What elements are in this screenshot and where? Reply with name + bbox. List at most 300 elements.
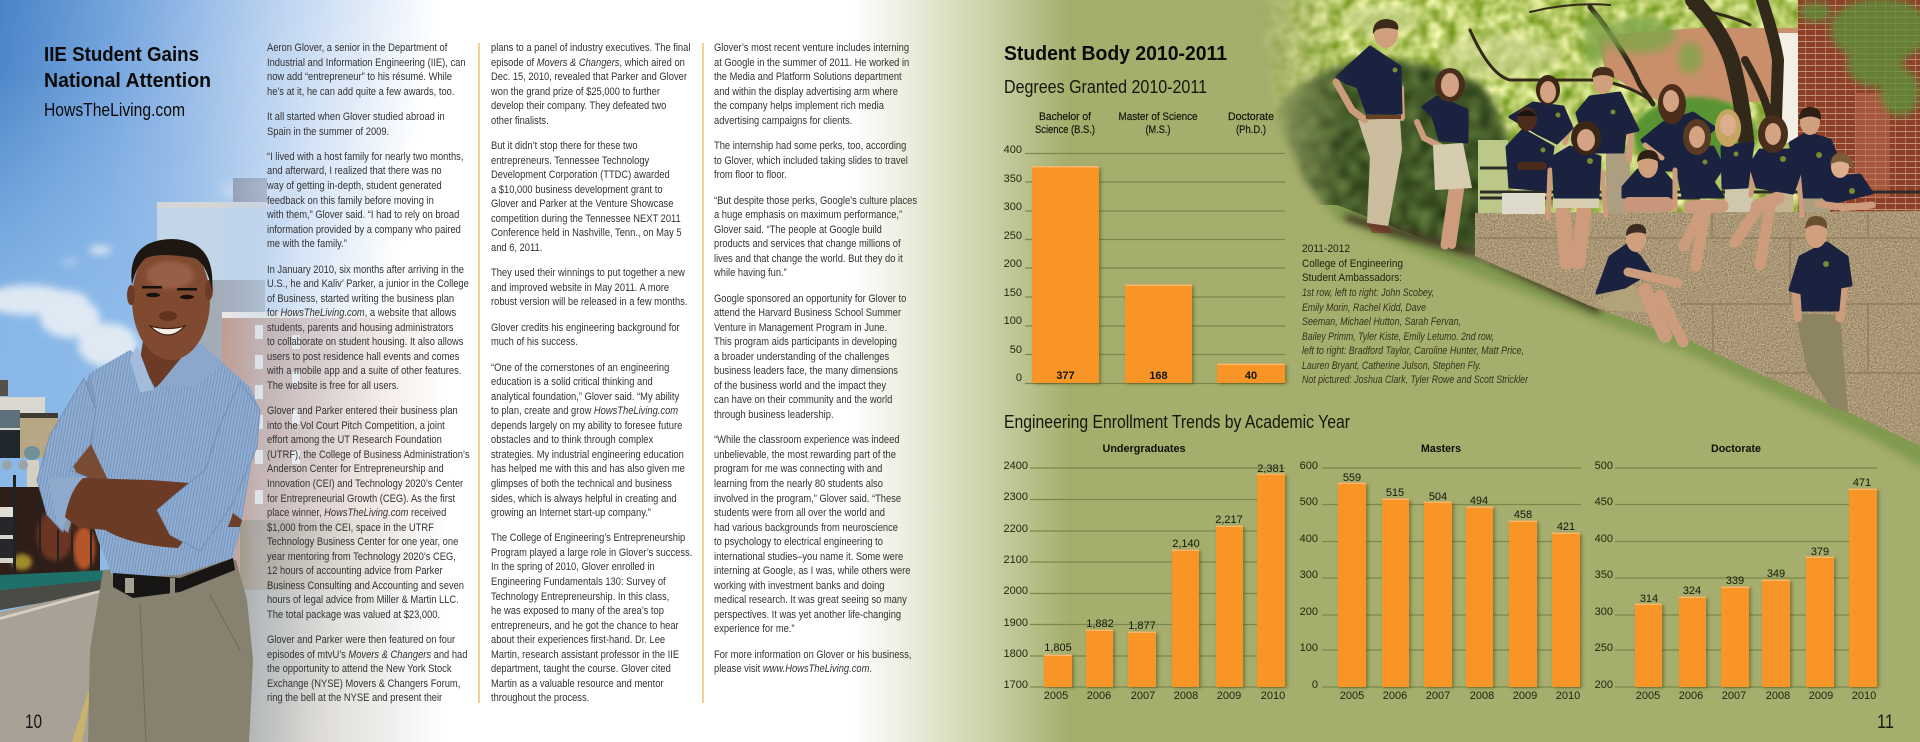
right sleeve (157, 382, 260, 551)
y axis labels: 500 (1300, 496, 1318, 508)
article column 2: other finalists. (491, 115, 549, 127)
hand behind arm (228, 513, 242, 527)
article column 2: sides, which is always helpful in creating and (491, 492, 677, 504)
dark bush (1260, 60, 1510, 253)
y axis labels: 600 (1300, 460, 1318, 472)
article column 1: for Entrepreneurial Growth (CEG). As the first (267, 492, 455, 504)
values (1343, 472, 1575, 533)
foliage right (1799, 0, 1920, 116)
article column 1: feedback on this family before moving in (267, 195, 434, 207)
article column 3: the company helps implement rich media (714, 100, 884, 112)
stone wall (1475, 211, 1920, 455)
bars (1032, 167, 1285, 383)
y axis labels: 400 (1004, 144, 1022, 156)
hanging leaves (1583, 12, 1702, 74)
y axis labels: 200 (1595, 679, 1613, 691)
years: 2006 (1087, 690, 1111, 702)
caption: student ambassadors: left to right: Bradford Taylor, Caroline Hunter, Matt Price, (1302, 345, 1524, 357)
values: 559 (1343, 472, 1361, 484)
values: 1,805 (1044, 642, 1072, 654)
article column 2: Glover credits his engineering background for (491, 322, 680, 334)
values: 379 (1811, 546, 1829, 558)
y axis labels: 250 (1595, 642, 1613, 654)
caption: student ambassadors: Student Ambassadors: (1302, 272, 1402, 284)
y axis labels: 0 (1312, 679, 1318, 691)
bar highlights (1044, 474, 1285, 656)
article column 1: Aeron Glover, a senior in the Department of (267, 42, 447, 54)
y axis labels: 150 (1004, 287, 1022, 299)
person 4 (1502, 107, 1553, 214)
column rule 1 (478, 43, 480, 703)
tree trunks (1470, 0, 1778, 140)
values: 504 (1429, 491, 1447, 503)
article column 3: products and services that change millions of (714, 238, 901, 250)
person 11 (1735, 115, 1802, 265)
article column 1: students, parents and housing administrators (267, 322, 454, 334)
article column 2: Martin, research assistant professor in the IIE (491, 649, 679, 661)
heading: IIE Student Gains National Attention: IIE Student Gains (44, 44, 199, 66)
article column 3: business leaders face, the many dimensions (714, 365, 898, 377)
y axis labels: 100 (1300, 642, 1318, 654)
column headers: Master of Science (1118, 111, 1198, 123)
article column 1: to collaborate on student housing. It also allows (267, 336, 463, 348)
railing (1480, 168, 1920, 198)
y axis labels: 50 (1010, 344, 1022, 356)
y axis labels: 2400 (1004, 460, 1028, 472)
article column 1 (267, 42, 470, 704)
article column 2: robust version will be released in a few months. (491, 296, 687, 308)
foliage (1266, 0, 1798, 213)
article column 3: Glover said. “The people at Google build (714, 224, 882, 236)
head (132, 240, 210, 360)
article column 3: from floor to floor. (714, 169, 787, 181)
article column 2: Martin as a valuable resource and mentor (491, 678, 664, 690)
article column 1: The website is free for all users. (267, 380, 399, 392)
article column 3: through business leadership. (714, 409, 834, 421)
caption: student ambassadors: Not pictured: Joshua Clark, Tyler Rowe and Scott Strickler (1302, 374, 1529, 386)
article column 3: “But despite those perks, Google’s culture places (714, 195, 917, 207)
article column 1: Exchange (NYSE) Movers & Changers Forum, (267, 678, 460, 690)
years: 2008 (1470, 690, 1494, 702)
y axis labels: 0 (1016, 372, 1022, 384)
years: 2010 (1852, 690, 1876, 702)
article column 2: glimpses of both the technical and business (491, 478, 672, 490)
years (1340, 690, 1580, 702)
article column 3: a huge emphasis on maximum performance,” (714, 209, 902, 221)
article column 3 (714, 42, 917, 675)
article column 3: the Media and Platform Solutions department (714, 71, 902, 83)
article column 1: with a mobile app and a suite of other features. (267, 365, 461, 377)
article column 1: Technology Business Center for one year, one (267, 536, 458, 548)
grass slope (1319, 205, 1920, 470)
years: 2005 (1636, 690, 1660, 702)
page number 11: 11 (1877, 712, 1894, 733)
person 6 (1548, 121, 1606, 262)
article column 2: throughout the process. (491, 692, 589, 704)
chart: masters (1300, 443, 1581, 702)
years: 2010 (1261, 690, 1285, 702)
heading: IIE Student Gains National Attention: National Attention (44, 70, 211, 92)
article column 3: attend the Harvard Business School Summer (714, 307, 901, 319)
caption: student ambassadors: 1st row, left to right: John Scobey, (1302, 287, 1434, 299)
article column 2: entrepreneurs. Tennessee Technology (491, 155, 649, 167)
values: 339 (1726, 575, 1744, 587)
years: 2006 (1679, 690, 1703, 702)
y axis labels: 300 (1300, 569, 1318, 581)
article column 1: me with the family.” (267, 238, 347, 250)
trees (0, 487, 100, 575)
article column 3: Google sponsored an opportunity for Glover to (714, 293, 906, 305)
article column 2: In the spring of 2010, Glover enrolled in (491, 561, 655, 573)
article column 2: obstacles and to think through complex (491, 434, 653, 446)
article column 3: Glover’s most recent venture includes interning (714, 42, 909, 54)
article column 1: Spain in the summer of 2009. (267, 126, 389, 138)
person 15 (1790, 216, 1851, 413)
column rule 2 (702, 43, 704, 703)
article column 3: at Google in the summer of 2011. He worked in (714, 57, 909, 69)
y axis labels: 350 (1004, 173, 1022, 185)
years: 2009 (1809, 690, 1833, 702)
bar values: 40 (1245, 370, 1257, 382)
left buildings (0, 380, 8, 396)
article column 2: much of his success. (491, 336, 578, 348)
bar values (1056, 370, 1257, 382)
article column 3: please visit www.HowsTheLiving.com. (714, 663, 872, 675)
article column 1: Business Consulting and Accounting and seven (267, 580, 464, 592)
back hand (72, 438, 108, 492)
years (1044, 690, 1285, 702)
shirt shading (62, 373, 96, 450)
years: 2008 (1174, 690, 1198, 702)
bridge railing (0, 570, 110, 590)
caption: student ambassadors: Bailey Primm, Tyler Kiste, Emily Letumo. 2nd row, (1302, 331, 1494, 343)
collar (130, 345, 154, 392)
article column 1: now add “entrepreneur” to his résumé. While (267, 71, 452, 83)
bars (1044, 474, 1285, 687)
y axis labels: 2000 (1004, 585, 1028, 597)
column headers: Doctorate (1228, 111, 1274, 123)
article column 1: 12 hours of accounting advice from Parker (267, 565, 443, 577)
y axis labels: 2100 (1004, 554, 1028, 566)
values: 1,877 (1128, 620, 1156, 632)
article column 1: It all started when Glover studied abroad in (267, 111, 445, 123)
column headers: (M.S.) (1146, 124, 1170, 136)
person 3 (1510, 75, 1572, 143)
y axis labels: 2300 (1004, 491, 1028, 503)
article column 1: Industrial and Information Engineering (IIE), can (267, 57, 466, 69)
grid lines (1030, 468, 1285, 687)
dirt strip (1345, 218, 1600, 310)
grid lines (1322, 468, 1581, 687)
article column 2: plans to a panel of industry executives. The final (491, 42, 690, 54)
grid lines (1025, 154, 1285, 384)
polo crests (1392, 68, 1855, 267)
article column 1: Innovation (CEI) and Technology 2020’s Center (267, 478, 463, 490)
page number 10: 10 (25, 712, 42, 733)
subheading: Enrollment Trends: Engineering Enrollment Trends by Academic Year (1004, 412, 1350, 432)
article column 2: episode of Movers & Changers, which aired on (491, 57, 685, 69)
article column 2: education is a solid critical thinking and (491, 376, 653, 388)
article column 1: “I lived with a host family for nearly two months, (267, 151, 463, 163)
fade to page at left (1255, 0, 1345, 260)
y axis labels: 300 (1595, 606, 1613, 618)
y axis labels: 2200 (1004, 523, 1028, 535)
person 10 (1715, 109, 1753, 212)
caption: student ambassadors (1302, 243, 1529, 386)
bar highlights (1338, 482, 1580, 534)
article column 1: place winner, HowsTheLiving.com received (267, 507, 446, 519)
article column 1: year mentoring from Technology 2020’s CEG, (267, 551, 456, 563)
years: 2005 (1340, 690, 1364, 702)
article column 2: a $10,000 business development grant to (491, 184, 663, 196)
forearm (65, 478, 200, 548)
subheading: Degrees Granted: Degrees Granted 2010-2011 (1004, 77, 1207, 97)
article column 2: growing an Internet start-up company.” (491, 507, 651, 519)
article column 3: program for me was connecting with and (714, 463, 882, 475)
lamp posts (13, 475, 92, 574)
bar highlights (1635, 488, 1877, 605)
article column 2: Program played a large role in Glover’s success. (491, 547, 692, 559)
years: 2007 (1131, 690, 1155, 702)
article column 2: to plan, create and grow HowsTheLiving.com (491, 405, 678, 417)
y axis labels: 200 (1004, 258, 1022, 270)
years: 2005 (1044, 690, 1068, 702)
article column 3: unbelievable, the most rewarding part of the (714, 449, 896, 461)
person 13 (1818, 153, 1872, 208)
values: 471 (1853, 477, 1871, 489)
person 1 (1336, 19, 1402, 233)
chart title: Masters (1421, 443, 1461, 455)
article column 1: the opportunity to attend the New York Stock (267, 663, 452, 675)
bright gaps (1340, 4, 1590, 180)
person 12 (1790, 107, 1837, 212)
article column 2: and improved website in May 2011. A more (491, 282, 669, 294)
heading: Student Body 2010-2011: Student Body 2010-2011 (1004, 43, 1227, 65)
bar highlights (1032, 166, 1285, 365)
years: 2009 (1513, 690, 1537, 702)
green page background (850, 0, 1920, 742)
article column 2: depends largely on my ability to foresee future (491, 420, 682, 432)
y axis labels (1004, 460, 1028, 691)
column headers: Science (B.S.) (1035, 124, 1095, 136)
values (1640, 477, 1871, 605)
years (1636, 690, 1876, 702)
article column 3: advertising campaigns for clients. (714, 115, 852, 127)
bars (1338, 483, 1580, 687)
grid lines (1615, 468, 1877, 687)
article column 3: had various backgrounds from neuroscience (714, 522, 898, 534)
bar values: 377 (1056, 370, 1075, 382)
article column 1: for HowsTheLiving.com, a website that allows (267, 307, 456, 319)
chart title: Doctorate (1711, 443, 1761, 455)
y axis labels: 300 (1004, 201, 1022, 213)
neck (140, 335, 196, 388)
article column 1: hours of legal advice from Miller & Martin LLC. (267, 594, 459, 606)
values: 1,882 (1086, 618, 1114, 630)
person 7 (1642, 84, 1715, 170)
values: 421 (1557, 521, 1575, 533)
article column 1: with them,” Glover said. “I had to rely on broad (267, 209, 459, 221)
article column 2: about their experiences first-hand. Dr. Lee (491, 634, 665, 646)
hair (131, 239, 212, 290)
road centre line (72, 692, 91, 742)
bar values: 168 (1149, 370, 1168, 382)
article column 2: analytical foundation,” Glover said. “My ability (491, 391, 679, 403)
article column 3: This program aids participants in developing (714, 336, 897, 348)
caption: student ambassadors: College of Engineering (1302, 258, 1403, 270)
hedge (1633, 97, 1757, 173)
article column 3: medical research. It was great seeing so many (714, 594, 907, 606)
y axis labels (1300, 460, 1318, 691)
column headers: (Ph.D.) (1236, 124, 1266, 136)
article column 1: effort among the UT Research Foundation (267, 434, 442, 446)
trousers (88, 560, 253, 742)
article column 2: Dec. 15, 2010, revealed that Parker and Glover (491, 71, 687, 83)
article column 2: strategies. My industrial engineering education (491, 449, 684, 461)
chart: doctorate (1595, 443, 1877, 702)
article column 2: he was exposed to many of the area’s top (491, 605, 664, 617)
article column 3: working with investment banks and doing (714, 580, 884, 592)
article column 2: Development Corporation (TTDC) awarded (491, 169, 670, 181)
article column 1: (UTRF), the College of Business Administration’s (267, 449, 469, 461)
article column 3: learning from the nearly 80 students also (714, 478, 883, 490)
person 8 (1623, 150, 1673, 212)
article column 2: entrepreneurs, and he got the chance to hear (491, 620, 679, 632)
y axis labels: 450 (1595, 496, 1613, 508)
values: 2,217 (1215, 514, 1243, 526)
person 14 (1595, 224, 1683, 342)
article column 1: he’s at it, he can add quite a few awards, too. (267, 86, 454, 98)
article column 3: The internship had some perks, too, according (714, 140, 906, 152)
article column 2: Technology Entrepreneurship. In this class, (491, 591, 669, 603)
caption: student ambassadors: Lauren Bryant, Catherine Julson, Stephen Fly. (1302, 360, 1481, 372)
cityscape photo (0, 178, 429, 742)
years: 2006 (1383, 690, 1407, 702)
caption: student ambassadors: Emily Morin, Rachel Kidd, Dave (1302, 302, 1426, 314)
values: 314 (1640, 593, 1658, 605)
values: 2,381 (1257, 463, 1285, 475)
article column 1: Glover and Parker entered their business plan (267, 405, 458, 417)
article column 2: They used their winnings to put together a new (491, 267, 685, 279)
article column 1: U.S., he and Kaliv’ Parker, a junior in the College (267, 278, 469, 290)
article column 2: department, taught the course. Glover cited (491, 663, 671, 675)
article column 2: and 6, 2011. (491, 242, 542, 254)
brick building (1798, 0, 1920, 212)
article column 3: a broader understanding of the challenges (714, 351, 889, 363)
heading: IIE Student Gains National Attention (44, 44, 211, 120)
article column 1: ring the bell at the NYSE and present their (267, 692, 442, 704)
portrait of Aeron Glover (37, 239, 260, 742)
chart: degrees granted (1004, 111, 1285, 384)
person 2 (1417, 68, 1472, 245)
caption: student ambassadors: 2011-2012 (1302, 243, 1350, 255)
values: 349 (1767, 568, 1785, 580)
article column 3: experience for me.” (714, 623, 795, 635)
article column 3: Venture in Management Program in June. (714, 322, 887, 334)
values (1044, 463, 1285, 654)
article column 2: competition during the Tennessee NEXT 2011 (491, 213, 681, 225)
article column 2: has helped me with this and has also given me (491, 463, 685, 475)
article column 1: The total package was valued at $23,000. (267, 609, 440, 621)
column headers: Bachelor of (1039, 111, 1092, 123)
article column 3: and within the display advertising arm where (714, 86, 898, 98)
article column 3: to Glover, which included taking slides to travel (714, 155, 908, 167)
article column 2: Engineering Fundamentals 130: Survey of (491, 576, 666, 588)
left sleeve (37, 378, 96, 532)
y axis labels: 1800 (1004, 648, 1028, 660)
person 5 (1577, 67, 1638, 214)
article column 1: and afterward, I realized that there was no (267, 165, 442, 177)
bars (1635, 489, 1877, 687)
y axis labels (1595, 460, 1613, 691)
years: 2007 (1426, 690, 1450, 702)
article column 2: But it didn’t stop there for these two (491, 140, 638, 152)
years: 2007 (1722, 690, 1746, 702)
article column 1: In January 2010, six months after arriving in the (267, 264, 464, 276)
clouds (0, 180, 290, 367)
values: 494 (1470, 495, 1488, 507)
article column 1: Glover and Parker were then featured on four (267, 634, 455, 646)
article column 1: into the Vol Court Pitch Competition, a joint (267, 420, 445, 432)
values: 2,140 (1172, 538, 1200, 550)
article column 2: “One of the cornerstones of an engineering (491, 362, 669, 374)
article column 2: develop their company. They defeated two (491, 100, 666, 112)
years: 2008 (1766, 690, 1790, 702)
article column 1: episodes of mtvU’s Movers & Changers and had (267, 649, 467, 661)
sky background (0, 0, 480, 742)
y axis labels: 400 (1300, 533, 1318, 545)
heading: IIE Student Gains National Attention: HowsTheLiving.com (44, 100, 185, 120)
y axis labels: 500 (1595, 460, 1613, 472)
mouth (150, 326, 185, 335)
y axis labels: 1900 (1004, 617, 1028, 629)
y axis labels: 400 (1595, 533, 1613, 545)
column headers (1035, 111, 1274, 136)
article column 1: users to post residence hall events and comes (267, 351, 459, 363)
article column 3: to psychology to electrical engineering to (714, 536, 883, 548)
face highlight (146, 261, 194, 289)
article column 3: of the business world and the impact they (714, 380, 886, 392)
chart: undergraduates (1004, 443, 1285, 702)
chart title: Undergraduates (1102, 443, 1186, 455)
article column 1: $1,000 from the CEI, space in the UTRF (267, 522, 434, 534)
article column 1: of Business, started writing the business plan (267, 293, 454, 305)
left cuff (48, 477, 85, 533)
article column 1: way of getting in-depth, student generated (267, 180, 442, 192)
article column 2: Glover and Parker at the Venture Showcase (491, 198, 673, 210)
y axis labels: 250 (1004, 230, 1022, 242)
y axis labels (1004, 144, 1022, 384)
article column 3: “While the classroom experience was indeed (714, 434, 900, 446)
article column 3: involved in the program,” Glover said. “These (714, 492, 901, 504)
article column 1: information provided by a company who paired (267, 224, 461, 236)
peach building (1597, 28, 1800, 105)
nose shadow (159, 311, 177, 321)
years: 2009 (1217, 690, 1241, 702)
light gap behind rail (1478, 140, 1508, 215)
article column 3: while having fun.” (714, 267, 787, 279)
y axis labels: 350 (1595, 569, 1613, 581)
person 9 (1675, 119, 1723, 266)
student ambassadors group photo (1230, 0, 1920, 490)
white wall strip (1778, 33, 1800, 143)
values: 515 (1386, 487, 1404, 499)
y axis labels: 1700 (1004, 679, 1028, 691)
values: 458 (1514, 509, 1532, 521)
article column 3: For more information on Glover or his business, (714, 649, 911, 661)
article column 2: won the grand prize of $25,000 to further (491, 86, 660, 98)
values: 324 (1683, 585, 1701, 597)
